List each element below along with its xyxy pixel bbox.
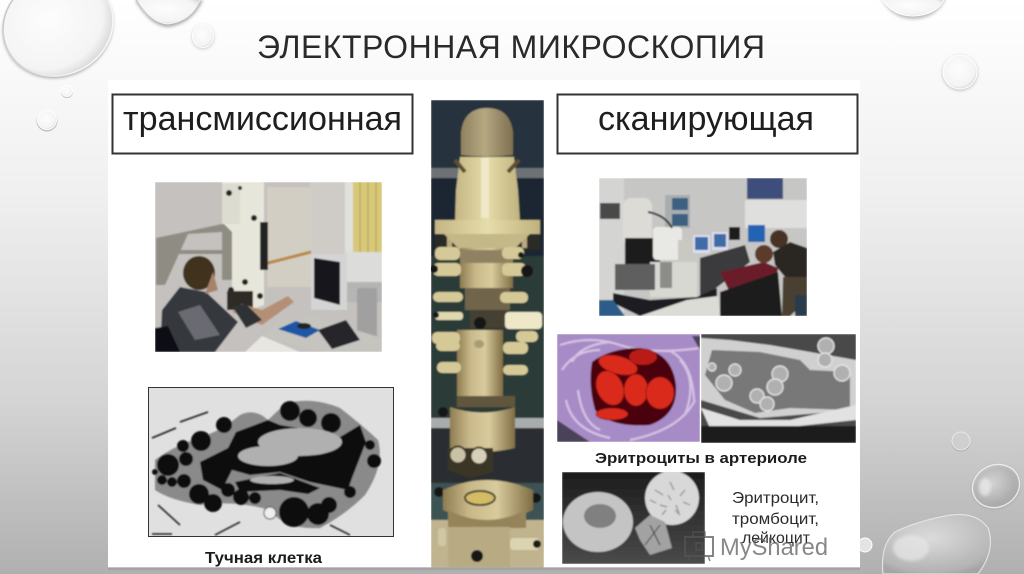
- box: сканирующая: [558, 94, 858, 154]
- image: blood cells micrograph: [562, 471, 705, 564]
- image: electron microscope column: [430, 100, 544, 568]
- title: ЭЛЕКТРОННАЯ МИКРОСКОПИЯ: [257, 29, 765, 65]
- box: сканирующая: сканирующая: [598, 100, 814, 138]
- box: трансмиссионная: [112, 94, 412, 154]
- image: erythrocytes grayscale micrograph: [701, 334, 856, 443]
- watermark: MyShared: [685, 532, 828, 561]
- panel bottom edge: [108, 567, 860, 570]
- white content panel: [108, 80, 860, 568]
- watermark: MyShared: MyShared: [720, 534, 828, 561]
- caption: Эритроцит, тромбоцит, лейкоцит: тромбоцит,: [732, 511, 819, 528]
- photo: scanning microscope workstation: [599, 178, 807, 316]
- caption: Эритроциты в артериоле: Эритроциты в артериоле: [595, 450, 807, 467]
- caption: Тучная клетка: Тучная клетка: [205, 550, 322, 567]
- image: mast cell micrograph: [148, 388, 394, 536]
- photo: operator at transmission microscope: [155, 182, 382, 352]
- box: трансмиссионная: трансмиссионная: [123, 100, 402, 138]
- caption: Эритроцит, тромбоцит, лейкоцит: лейкоцит: [742, 530, 811, 547]
- caption: Эритроцит, тромбоцит, лейкоцит: [732, 490, 819, 547]
- caption: Эритроцит, тромбоцит, лейкоцит: Эритроцит,: [732, 490, 819, 507]
- image: erythrocytes colored micrograph: [557, 334, 700, 442]
